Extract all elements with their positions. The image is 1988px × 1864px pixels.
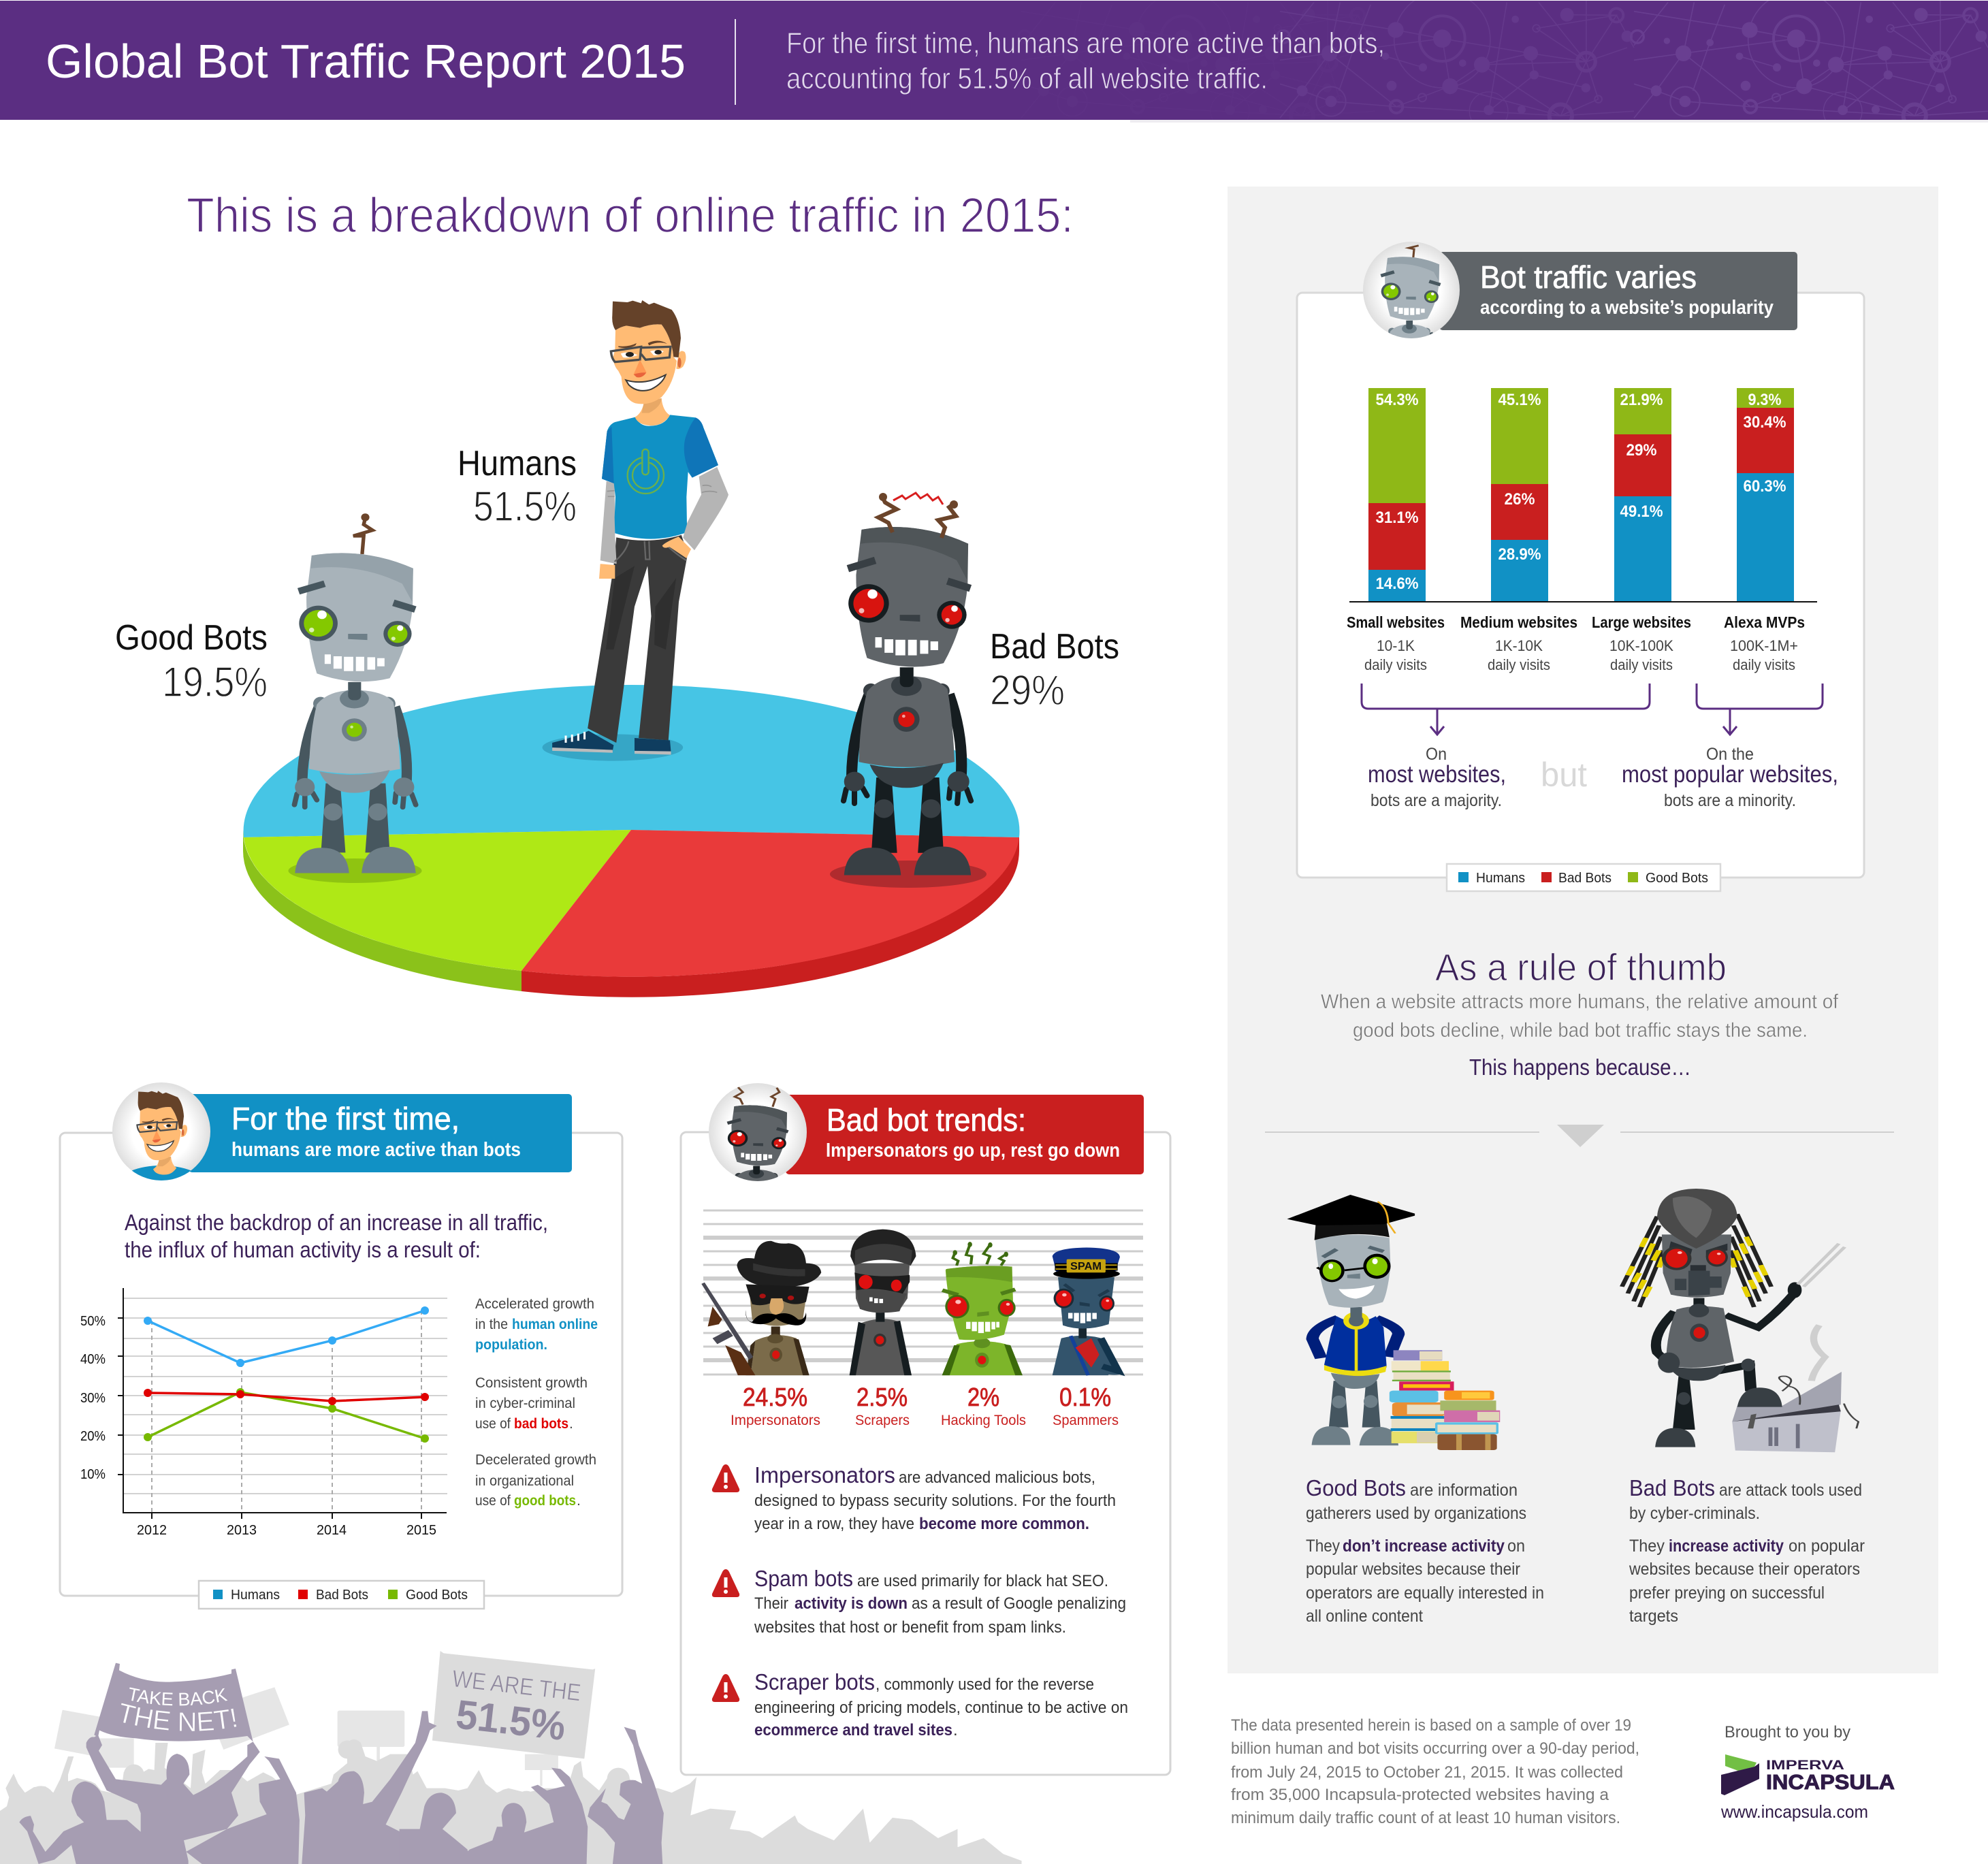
chart annotations: bad bots (514, 1416, 568, 1432)
callout: most websites: On (1426, 745, 1447, 764)
callout: popular websites: On the (1706, 745, 1754, 764)
stacked bar chart: 29% (1626, 441, 1657, 460)
text: bad bots: They (1629, 1537, 1665, 1556)
legend: Good Bots (1646, 871, 1708, 886)
text: impersonators: become more common. (919, 1515, 1089, 1533)
text: bad bots: by cyber-criminals. (1629, 1504, 1760, 1523)
pie chart (243, 685, 1020, 997)
sponsor logo: INCAPSULA (1766, 1770, 1895, 1794)
line chart: 2012 (137, 1523, 167, 1538)
text: scraper bots: , commonly used for the reverse (876, 1675, 1094, 1694)
panel: right grey background (1228, 187, 1938, 1673)
bar category labels: daily visits (1364, 656, 1427, 673)
callout: popular websites (1622, 745, 1838, 810)
chart annotations: good bots (514, 1493, 576, 1509)
mugshot: impersonator (701, 1241, 821, 1375)
text: impersonators: Impersonators (754, 1462, 895, 1488)
legend: Humans (1476, 871, 1525, 886)
text: bad bots (1629, 1475, 1865, 1626)
text: spam bots: Their (754, 1594, 788, 1613)
sign text: take back the net (121, 1687, 237, 1731)
footnote: minimum daily traffic count of at least 10 human visitors. (1231, 1809, 1620, 1827)
callout: but: but (1541, 756, 1587, 794)
text: impersonators: are advanced malicious bots, (899, 1468, 1095, 1487)
character: graduate good bot with books (1287, 1195, 1500, 1450)
sign text: we are the 51.5%: WE ARE THE (451, 1665, 582, 1706)
bot type percentages (731, 1383, 1119, 1428)
text: impersonators: year in a row, they have (754, 1515, 914, 1533)
label: humans (458, 444, 577, 530)
bar category labels: Large websites (1592, 613, 1691, 631)
footnote: billion human and bot visits occurring over a 90-day period, (1231, 1739, 1639, 1758)
rule of thumb text: good bots decline, while bad bot traffic stays the same. (1353, 1019, 1808, 1042)
mugshot: scraper (850, 1230, 916, 1375)
bar category labels: 10K-100K (1609, 637, 1673, 654)
section banner: first time: humans are more active than bots (231, 1139, 521, 1161)
mugshot: spammer (1053, 1247, 1122, 1375)
sign text: take back the net: THE NET! (121, 1703, 237, 1731)
legend: Good Bots (406, 1588, 468, 1603)
text: scraper bots: Scraper bots (754, 1669, 875, 1694)
bot type percentages: 24.5% (743, 1383, 807, 1412)
section banner: first time: For the first time, (231, 1101, 460, 1136)
bar category labels: daily visits (1488, 656, 1550, 673)
bot type percentages: 0.1% (1059, 1383, 1111, 1412)
line chart: 2013 (227, 1523, 257, 1538)
breakdown heading: This is a breakdown of online traffic in 2015: (187, 189, 1074, 243)
text: spam bots: are used primarily for black hat SEO. (857, 1572, 1108, 1590)
character: human (543, 300, 728, 761)
text: impersonators: designed to bypass security solutions. For the fourth (754, 1492, 1116, 1510)
mugshot: hacking tool (942, 1242, 1023, 1375)
chart annotations: Consistent growth (475, 1375, 588, 1391)
crowd illustration (0, 1651, 1021, 1864)
text: impersonators (754, 1462, 1116, 1533)
bar category labels: 1K-10K (1495, 637, 1543, 654)
text: good bots: Good Bots (1306, 1475, 1406, 1500)
bot type percentages: Spammers (1053, 1413, 1119, 1428)
bot type percentages: Scrapers (855, 1413, 910, 1428)
section banner: bad bot trends: Impersonators go up, rest go down (826, 1140, 1120, 1161)
header subtitle: For the first time, humans are more active than bots, (786, 27, 1385, 60)
header network pattern (1276, 1, 1988, 120)
label: bad bots: 29% (990, 667, 1065, 714)
text: good bots (1306, 1475, 1544, 1626)
footnote: The data presented herein is based on a sample of over 19 (1231, 1716, 1631, 1735)
text: scraper bots (754, 1669, 1128, 1739)
bot type percentages: Impersonators (731, 1413, 820, 1428)
bar category labels: 10-1K (1377, 637, 1415, 654)
label: good bots (115, 618, 268, 706)
callout: popular websites: most popular websites, (1622, 761, 1838, 788)
sponsor logo: Brought to you by (1725, 1723, 1850, 1741)
chart annotations: Accelerated growth (475, 1296, 594, 1312)
callout: most websites: bots are a majority. (1370, 791, 1502, 810)
bar category labels: Alexa MVPs (1724, 613, 1805, 631)
mugshot stripes (703, 1210, 1143, 1375)
text: bad bots: Bad Bots (1629, 1475, 1715, 1500)
line chart (80, 1288, 447, 1538)
bot type percentages: Hacking Tools (941, 1413, 1026, 1428)
intro text: the influx of human activity is a result of: (125, 1237, 481, 1262)
icon: warning scraper (712, 1674, 739, 1702)
header title: Global Bot Traffic Report 2015 (46, 35, 686, 88)
text: spam bots: Spam bots (754, 1566, 853, 1591)
stacked bar chart: 54.3% (1375, 391, 1419, 409)
stacked bar chart: 28.9% (1498, 545, 1541, 564)
character: good bot (289, 513, 422, 883)
icon: warning spam (712, 1569, 739, 1597)
sponsor logo: IMPERVA (1766, 1758, 1844, 1773)
text: spam bots (754, 1566, 1126, 1637)
callout: most websites: most websites, (1368, 761, 1506, 788)
legend (1447, 864, 1720, 891)
line chart: 20% (80, 1429, 106, 1444)
header banner (0, 0, 1988, 131)
legend (199, 1581, 484, 1609)
bar category labels (1347, 613, 1805, 673)
bar category labels: daily visits (1610, 656, 1673, 673)
stacked bar chart: 14.6% (1375, 575, 1419, 593)
section banner: bad bot trends: Bad bot trends: (827, 1102, 1026, 1138)
stacked bar chart: 45.1% (1498, 391, 1541, 409)
text: good bots: don’t increase activity (1343, 1537, 1505, 1556)
section banner: bot traffic varies (1363, 242, 1797, 338)
line chart: 2015 (406, 1523, 436, 1538)
label: good bots: Good Bots (115, 618, 268, 658)
stacked bar chart: 26% (1505, 490, 1535, 509)
label: humans: 51.5% (473, 483, 577, 530)
character: bad bot (830, 493, 987, 888)
text: bad bots: increase activity (1669, 1537, 1784, 1556)
bot type percentages: 2% (967, 1383, 999, 1412)
label: good bots: 19.5% (162, 659, 268, 706)
stacked bar chart: 9.3% (1748, 391, 1781, 409)
text: bad bots: on popular (1789, 1537, 1865, 1556)
chart annotations: use of (475, 1416, 511, 1432)
line chart: 10% (80, 1467, 106, 1482)
footnote: from July 24, 2015 to October 21, 2015. It was collected (1231, 1763, 1623, 1782)
chart annotations: in the (475, 1317, 508, 1332)
text: good bots: operators are equally interested in (1306, 1584, 1544, 1603)
text: good bots: popular websites because their (1306, 1560, 1520, 1579)
chart annotations: in cyber-criminal (475, 1396, 575, 1411)
text: good bots: gatherers used by organizations (1306, 1504, 1526, 1523)
text: spam bots: as a result of Google penalizing (912, 1594, 1126, 1613)
spam badge text: SPAM (1070, 1261, 1102, 1272)
chart annotations: . (569, 1416, 573, 1432)
stacked bar chart: 60.3% (1743, 477, 1786, 496)
legend: Humans (231, 1588, 280, 1603)
chart annotations: Decelerated growth (475, 1452, 596, 1468)
rule of thumb text: This happens because… (1469, 1055, 1691, 1080)
section banner: first time (112, 1082, 572, 1180)
intro text: Against the backdrop of an increase in all traffic, (125, 1210, 548, 1235)
footnote (1231, 1716, 1639, 1827)
panel: humans more active (60, 1082, 622, 1609)
sign text: we are the 51.5%: 51.5% (454, 1691, 568, 1749)
line chart: 40% (80, 1352, 106, 1367)
section banner: bad bot trends (709, 1083, 1144, 1181)
stacked bar chart (1349, 388, 1817, 602)
callout: popular websites: bots are a minority. (1664, 791, 1796, 810)
chart annotations: population. (475, 1337, 547, 1353)
label: humans: Humans (458, 444, 577, 483)
bar category labels: Medium websites (1460, 613, 1577, 631)
header subtitle: accounting for 51.5% of all website traffic. (786, 62, 1268, 95)
text: scraper bots: ecommerce and travel sites (754, 1721, 952, 1739)
text: scraper bots: engineering of pricing models, continue to be active on (754, 1699, 1128, 1717)
chart annotations: use of (475, 1493, 511, 1509)
sponsor logo (1720, 1723, 1895, 1822)
line chart: 50% (80, 1314, 106, 1329)
intro text (125, 1210, 548, 1262)
callout: most websites (1368, 745, 1506, 810)
text: scraper bots: . (953, 1721, 958, 1739)
bot type percentages: 2.5% (856, 1383, 908, 1412)
text: bad bots: websites because their operators (1629, 1560, 1860, 1579)
legend: Bad Bots (316, 1588, 368, 1603)
divider with arrow (1265, 1125, 1894, 1147)
chart annotations: human online (512, 1317, 598, 1332)
icon: warning impersonators (712, 1464, 739, 1492)
brackets and arrows (1362, 684, 1823, 735)
label: bad bots (990, 627, 1119, 714)
legend: Bad Bots (1558, 871, 1612, 886)
text: good bots: are information (1410, 1481, 1518, 1500)
text: spam bots: activity is down (795, 1594, 908, 1613)
sponsor logo: www.incapsula.com (1720, 1801, 1868, 1822)
bar category labels: daily visits (1733, 656, 1795, 673)
sign text: take back the net: TAKE BACK (129, 1687, 227, 1706)
rule of thumb text: As a rule of thumb (1435, 946, 1727, 989)
footnote: from 35,000 Incapsula-protected websites having a (1231, 1786, 1609, 1804)
bar category labels: 100K-1M+ (1730, 637, 1798, 654)
text: good bots: on (1507, 1537, 1525, 1556)
section banner: bot traffic varies: Bot traffic varies (1480, 259, 1697, 295)
chart annotations: . (577, 1493, 581, 1509)
text: spam bots: websites that host or benefit from spam links. (754, 1618, 1066, 1637)
panel: bad bot trends (681, 1083, 1170, 1775)
chart annotations (475, 1296, 598, 1509)
stacked bar chart: 31.1% (1375, 509, 1419, 527)
character: predator bad bot with server (1622, 1189, 1859, 1452)
line chart: 30% (80, 1391, 106, 1406)
line chart: 2014 (317, 1523, 347, 1538)
text: bad bots: prefer preying on successful (1629, 1584, 1825, 1603)
bar category labels: Small websites (1347, 613, 1445, 631)
label: bad bots: Bad Bots (990, 627, 1119, 666)
panel: popularity chart (1297, 242, 1864, 891)
stacked bar chart: 49.1% (1620, 502, 1663, 521)
text: bad bots: are attack tools used (1719, 1481, 1862, 1500)
text: good bots: They (1306, 1537, 1340, 1556)
rule of thumb text: When a website attracts more humans, the relative amount of (1321, 991, 1839, 1013)
header subtitle (786, 27, 1385, 95)
text: good bots: all online content (1306, 1607, 1423, 1626)
text: bad bots: targets (1629, 1607, 1678, 1626)
section banner: bot traffic varies: according to a website’s popularity (1480, 297, 1774, 319)
stacked bar chart: 30.4% (1743, 413, 1786, 432)
stacked bar chart: 21.9% (1620, 391, 1663, 409)
sign text: we are the 51.5% (451, 1665, 582, 1749)
rule of thumb text (1321, 946, 1839, 1080)
chart annotations: in organizational (475, 1473, 574, 1489)
